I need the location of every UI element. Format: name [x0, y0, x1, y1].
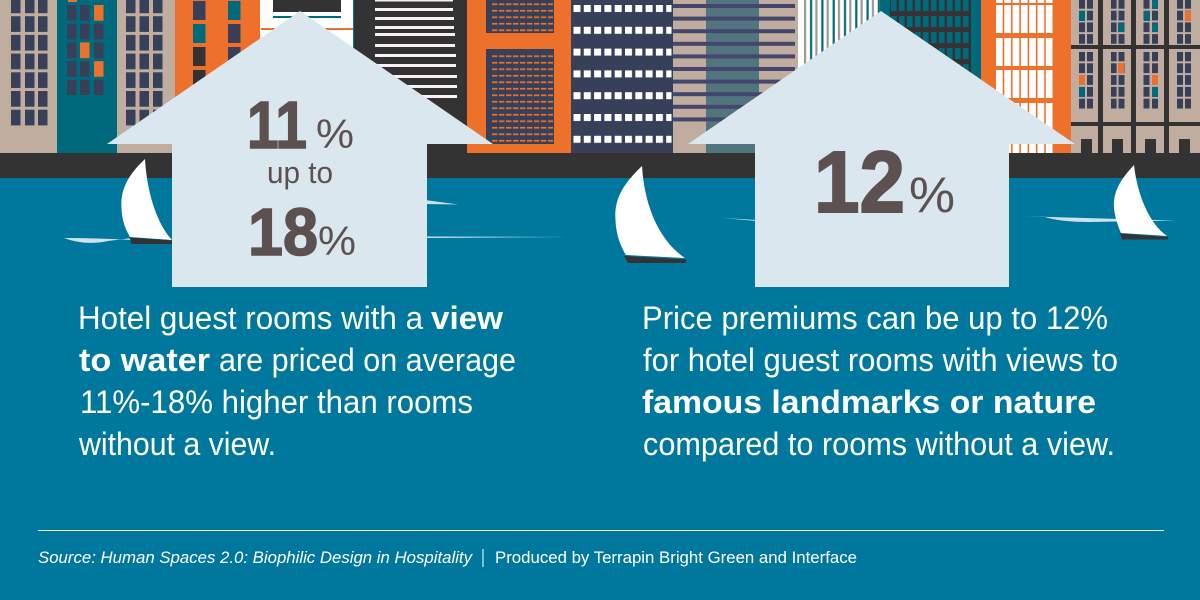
building: orange — [175, 0, 260, 153]
footer source — [38, 548, 857, 567]
text block: landmark view — [642, 300, 1118, 462]
building: teal with orange windows — [57, 0, 117, 153]
building: orange with white panes — [981, 0, 1071, 153]
stat: 11%: % — [316, 111, 354, 157]
water wakes — [46, 200, 1175, 243]
stat: 12%: % — [909, 167, 955, 223]
building: orange with navy window blocks — [467, 0, 571, 153]
footer rule — [38, 530, 1164, 531]
footer source: Source: Human Spaces 2.0: Biophilic Design in Hospitality — [38, 548, 473, 567]
city skyline — [0, 0, 1200, 153]
building: white with vertical stripes — [798, 0, 880, 153]
stat: 18%: % — [318, 218, 356, 264]
sailboat 1 — [121, 159, 173, 244]
sailboat 2 — [615, 166, 686, 263]
stat: 12%: 12 — [814, 134, 905, 231]
text block: landmark view: famous landmarks or nature — [642, 384, 1096, 420]
dark waterfront strip — [0, 153, 1200, 178]
text block: water view: 11%-18% higher than rooms — [80, 384, 473, 420]
stat: 11%: 11 — [247, 88, 307, 163]
building: tan and teal striped — [673, 0, 798, 153]
building: tan left — [0, 0, 57, 153]
building: tan right with dark frame — [1071, 0, 1200, 153]
text block: water view: are priced on average — [219, 342, 516, 378]
text block: landmark view: Price premiums can be up to 12% — [642, 300, 1108, 336]
text block: landmark view: for hotel guest rooms with views to — [643, 342, 1118, 378]
text block: water view: to water — [79, 342, 210, 378]
building: navy with white squares — [571, 0, 673, 153]
footer source: Produced by Terrapin Bright Green and Interface — [495, 548, 857, 567]
building: dark with white stripes — [354, 0, 467, 153]
building: white — [260, 0, 353, 153]
text block: landmark view: compared to rooms without a view. — [643, 426, 1115, 462]
stat: 18%: 18 — [248, 195, 318, 270]
arrow panel: 12% — [688, 11, 1075, 287]
text block: water view: view — [431, 300, 503, 336]
text: up to: up to — [267, 155, 333, 190]
text block: water view: without a view. — [78, 426, 276, 462]
stat: 12% — [814, 134, 955, 231]
building: tan second — [117, 0, 175, 153]
text block: water view: Hotel guest rooms with a — [78, 300, 423, 336]
arrow panel: 11% up to 18% — [107, 11, 493, 287]
building: teal with dark grid — [880, 0, 981, 153]
sailboat 3 — [1114, 165, 1168, 240]
text block: water view — [78, 300, 516, 462]
stat: 11% — [247, 88, 354, 163]
stat: 18% — [248, 195, 356, 270]
